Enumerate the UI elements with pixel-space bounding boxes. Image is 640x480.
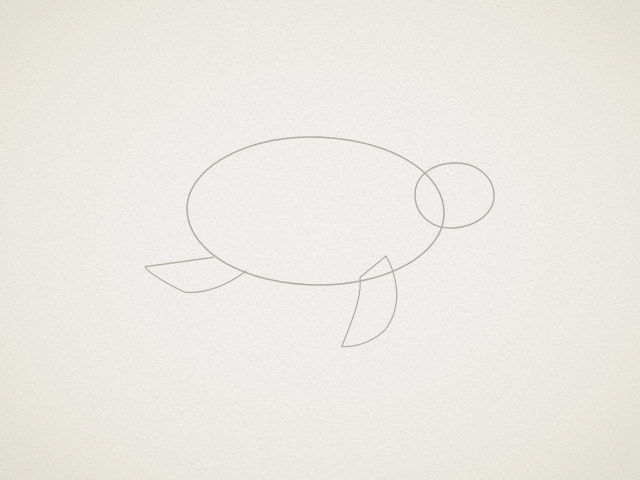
front flipper outline: [342, 256, 397, 347]
turtle body outline: [187, 137, 444, 285]
back flipper outline: [145, 257, 246, 293]
turtle sketch: [145, 137, 494, 347]
turtle head outline: [415, 163, 494, 228]
